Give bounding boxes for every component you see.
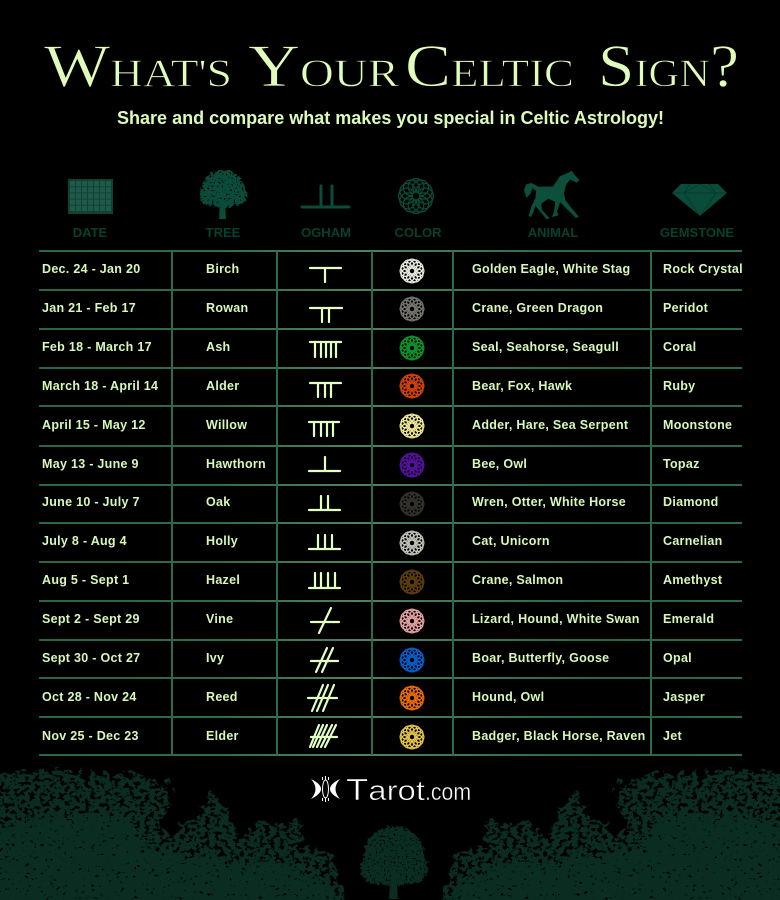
gemstone column: Peridot — [663, 301, 709, 315]
gemstone column: Coral — [663, 340, 696, 354]
icon: triple moon — [311, 776, 340, 802]
column header: animal — [524, 171, 579, 240]
tree column: Oak — [206, 495, 230, 509]
tree column: Ash — [206, 340, 230, 354]
icon: calendar — [68, 179, 113, 214]
column header: date: DATE — [73, 225, 108, 240]
table grid — [39, 251, 742, 755]
gemstone column: Topaz — [663, 457, 700, 471]
date column: April 15 - May 12 — [42, 418, 146, 432]
gemstone column: Emerald — [663, 612, 714, 626]
date column: Feb 18 - March 17 — [42, 340, 152, 354]
tree column: Alder — [206, 379, 239, 393]
tree column — [206, 262, 266, 743]
icon: diamond — [672, 184, 727, 216]
date column: Nov 25 - Dec 23 — [42, 729, 139, 743]
column header: animal: ANIMAL — [528, 225, 578, 240]
left trees — [0, 767, 350, 900]
date column: July 8 - Aug 4 — [42, 534, 127, 548]
logo: Tarot.com: Tarot — [346, 772, 425, 807]
color column: knots — [400, 259, 424, 749]
gemstone column: Jasper — [663, 690, 705, 704]
column header: color — [395, 179, 442, 240]
animal column: Bee, Owl — [472, 457, 527, 471]
gemstone column: Ruby — [663, 379, 695, 393]
icon: horse — [524, 171, 579, 219]
column header: gemstone: GEMSTONE — [660, 225, 734, 240]
icon: tree — [200, 170, 247, 219]
date column: Aug 5 - Sept 1 — [42, 573, 129, 587]
animal column: Lizard, Hound, White Swan — [472, 612, 640, 626]
date column: March 18 - April 14 — [42, 379, 158, 393]
column header: ogham — [301, 186, 351, 240]
date column: Dec. 24 - Jan 20 — [42, 262, 140, 276]
logo: Tarot.com: .com — [425, 779, 471, 806]
animal column: Boar, Butterfly, Goose — [472, 651, 609, 665]
tree column: Rowan — [206, 301, 248, 315]
right trees — [437, 767, 780, 900]
tree column: Vine — [206, 612, 233, 626]
gemstone column — [663, 262, 743, 743]
animal column: Golden Eagle, White Stag — [472, 262, 630, 276]
icon: ogham — [302, 186, 349, 207]
animal column: Crane, Green Dragon — [472, 301, 603, 315]
icon: knot — [399, 179, 433, 213]
animal column: Crane, Salmon — [472, 573, 563, 587]
animal column: Cat, Unicorn — [472, 534, 550, 548]
ogham column — [308, 268, 342, 747]
tree column: Hazel — [206, 573, 240, 587]
gemstone column: Carnelian — [663, 534, 723, 548]
tree column: Elder — [206, 729, 239, 743]
subtitle: Share and compare what makes you special in Celtic Astrology! — [117, 108, 664, 128]
title: YOUR — [248, 33, 399, 99]
date column: Sept 30 - Oct 27 — [42, 651, 140, 665]
tree column: Reed — [206, 690, 238, 704]
column header: color: COLOR — [395, 225, 442, 240]
column header: gemstone — [660, 184, 734, 240]
gemstone column: Amethyst — [663, 573, 723, 587]
gemstone column: Jet — [663, 729, 682, 743]
gemstone column: Moonstone — [663, 418, 732, 432]
animal column: Hound, Owl — [472, 690, 544, 704]
date column: Jan 21 - Feb 17 — [42, 301, 136, 315]
animal column: Bear, Fox, Hawk — [472, 379, 572, 393]
forest silhouette — [0, 767, 780, 900]
animal column: Badger, Black Horse, Raven — [472, 729, 646, 743]
title: SIGN? — [598, 33, 739, 99]
title — [44, 33, 739, 99]
column header: tree: TREE — [206, 225, 241, 240]
tree column: Ivy — [206, 651, 224, 665]
animal column: Adder, Hare, Sea Serpent — [472, 418, 629, 432]
gemstone column: Diamond — [663, 495, 719, 509]
column header: date — [68, 179, 113, 240]
tree column: Willow — [206, 418, 247, 432]
center tree — [360, 826, 428, 899]
column header: ogham: OGHAM — [301, 225, 351, 240]
date column: Oct 28 - Nov 24 — [42, 690, 137, 704]
logo: Tarot.com — [311, 772, 471, 807]
date column: June 10 - July 7 — [42, 495, 140, 509]
gemstone column: Opal — [663, 651, 692, 665]
animal column: Seal, Seahorse, Seagull — [472, 340, 619, 354]
animal column: Wren, Otter, White Horse — [472, 495, 626, 509]
tree column: Holly — [206, 534, 238, 548]
tree column: Birch — [206, 262, 239, 276]
title: WHAT'S — [44, 33, 232, 99]
gemstone column: Rock Crystal — [663, 262, 743, 276]
date column: Sept 2 - Sept 29 — [42, 612, 140, 626]
column header: tree — [200, 170, 247, 240]
title: CELTIC — [405, 33, 574, 99]
animal column — [472, 262, 646, 743]
date column — [42, 262, 158, 743]
date column: May 13 - June 9 — [42, 457, 139, 471]
tree column: Hawthorn — [206, 457, 266, 471]
